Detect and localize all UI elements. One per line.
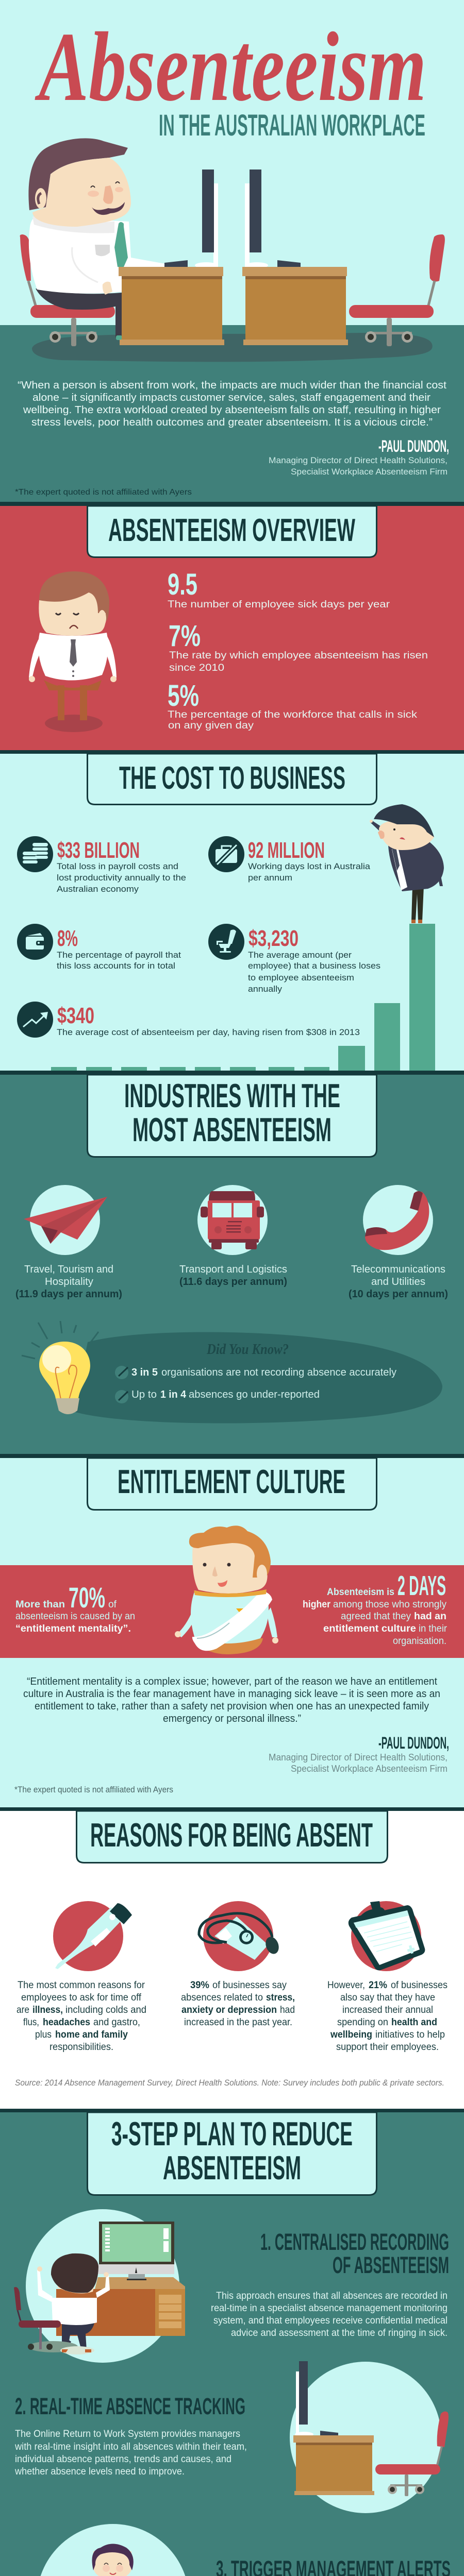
reason: illness: including colds and — [65, 2005, 146, 2015]
icon: paper plane — [24, 1197, 107, 1244]
heading — [88, 754, 376, 805]
callout: 70 percent: absenteeism is caused by an — [15, 1611, 135, 1622]
red band — [0, 1565, 464, 1658]
step 1 text: This approach ensures that all absences are recorded in — [216, 2291, 448, 2301]
callout: 70 percent: 70% — [69, 1581, 105, 1614]
fact: 3 in 5: 3 in 5 — [131, 1367, 158, 1378]
industry: transport: (11.6 days per annum) — [179, 1276, 287, 1287]
step 2 illustration: empty desk — [290, 2361, 449, 2513]
stat: 3,230: $3,230 — [248, 926, 299, 951]
icon: trend arrow — [17, 1002, 53, 1038]
callout: 70 percent: More than — [15, 1599, 65, 1610]
stat: rate risen — [169, 619, 428, 673]
stat: 3,230 — [208, 924, 380, 994]
reason: wellbeing spending: spending on — [337, 2017, 388, 2028]
callout: 2 days: among those who strongly — [333, 1599, 446, 1610]
heading: ABSENTEEISM — [163, 2149, 301, 2187]
reason: wellbeing spending: support their employees. — [336, 2042, 439, 2053]
panel: 3-step plan — [0, 2109, 464, 2576]
step 2 text: with real-time insight into all absences within their team, — [14, 2442, 247, 2452]
reason: wellbeing spending — [327, 1901, 448, 2053]
step 2 text: whether absence levels need to improve. — [14, 2466, 185, 2477]
heading — [88, 506, 376, 557]
stat: workforce: The percentage of the workforce that calls in sick — [168, 709, 418, 720]
step 1 text — [211, 2229, 449, 2338]
footnote: *The expert quoted is not affiliated with Ayers — [14, 1785, 173, 1794]
attribution: Managing Director of Direct Health Solutions, — [269, 1752, 448, 1762]
quote: emergency or personal illness.” — [163, 1713, 301, 1724]
attribution: Specialist Workplace Absenteeism Firm — [291, 1764, 448, 1774]
stat: 33 billion: Total loss in payroll costs and — [57, 862, 178, 871]
illustration: right desk — [242, 267, 348, 345]
reason: illness: headaches — [43, 2017, 90, 2028]
industry: transport — [179, 1185, 287, 1287]
quote: alone – it significantly impacts customer service, sales, staff engagement and their — [32, 392, 430, 403]
callout: 2 days: had an — [414, 1611, 446, 1622]
reason: wellbeing spending: 21% — [369, 1980, 387, 1991]
floor shadow — [32, 333, 433, 362]
quote: entitlement to take, rather than a safety net provision when one has an unexpected family — [35, 1701, 429, 1712]
icon: check 2 — [115, 1390, 128, 1403]
icon: blood pressure cuff — [199, 1913, 281, 1960]
callout: did you know: Did You Know? — [206, 1342, 289, 1358]
step 1 text: real-time in a specialist absence management monitoring — [211, 2303, 448, 2314]
reason: wellbeing spending: health and — [391, 2017, 437, 2028]
reason: stress: anxiety or depression — [181, 2005, 277, 2015]
panel: the cost to business — [0, 750, 464, 1071]
reason: illness: and gastro, — [93, 2017, 140, 2028]
panel: reasons for being absent — [0, 1807, 464, 2109]
step 1 text: advice and assessment at the time of ringing in sick. — [231, 2328, 448, 2338]
quote: stress levels, poor health outcomes and greater absenteeism. It is a vicious circle.” — [31, 417, 433, 428]
stat: sick days: 9.5 — [168, 568, 197, 601]
panel: entitlement culture — [0, 1454, 464, 1807]
industry: telecommunications: (10 days per annum) — [349, 1289, 448, 1300]
callout: 2 days: Absenteeism is — [327, 1587, 394, 1598]
stat: 340 per day: $340 — [57, 1003, 94, 1028]
panel: absenteeism overview — [0, 506, 464, 750]
callout: 2 days: in their — [419, 1623, 448, 1634]
stat: workforce — [168, 679, 418, 731]
reason: illness: The most common reasons for — [18, 1980, 145, 1991]
step 3 illustration: man with two laptops — [11, 2524, 215, 2576]
stat: rate risen: The rate by which employee absenteeism has risen — [169, 650, 428, 661]
illustration: empty red chair — [349, 234, 445, 346]
reason: wellbeing spending: also say that they have — [340, 1992, 435, 2003]
industry: travel: (11.9 days per annum) — [15, 1289, 122, 1300]
illustration: two back-to-back monitors — [164, 170, 301, 268]
stat: 8 percent: 8% — [57, 926, 78, 951]
stat: 92 million: Working days lost in Australia — [248, 862, 371, 871]
industry: travel: Travel, Tourism and — [24, 1264, 113, 1275]
stat: rate risen: 7% — [169, 619, 201, 653]
icon: wallet — [17, 924, 53, 960]
callout: 2 days: agreed that they — [341, 1611, 411, 1622]
industry: transport: Transport and Logistics — [179, 1264, 287, 1275]
step 2 text: The Online Return to Work System provides managers — [15, 2429, 240, 2439]
quote: wellbeing. The extra workload created by absenteeism falls on staff, resulting in higher — [23, 404, 441, 416]
icon: clipboard — [349, 1901, 425, 1970]
man — [56, 2544, 170, 2576]
industry: telecommunications — [349, 1185, 448, 1300]
fact: 1 in 4: Up to — [131, 1389, 157, 1400]
reason: illness: employees to ask for time off — [21, 1992, 142, 2003]
reason: illness: home and family — [55, 2029, 128, 2040]
callout: 70 percent: of — [108, 1599, 117, 1610]
stat: 8 percent: The percentage of payroll that — [57, 951, 181, 960]
stat: 3,230: employee) that a business loses — [248, 961, 380, 971]
step 1 illustration: person at computer — [14, 2209, 185, 2363]
heading — [76, 1811, 388, 1863]
icon: thermometer — [55, 1903, 132, 1969]
reason: stress: 39% — [190, 1980, 209, 1991]
reason: stress: had — [280, 2005, 295, 2015]
quote: “Entitlement mentality is a complex issue; however, part of the reason we have an entitlement — [27, 1676, 437, 1687]
icon: coins — [17, 836, 53, 872]
reason: illness: are — [16, 2005, 29, 2015]
quote — [23, 1676, 440, 1724]
reason: illness: flus, — [23, 2017, 39, 2028]
reason: stress: stress, — [266, 1992, 295, 2003]
heading — [88, 2112, 376, 2195]
stat: 33 billion: $33 BILLION — [57, 838, 140, 863]
fact: 1 in 4 — [131, 1389, 320, 1400]
icon: telephone handset — [365, 1191, 429, 1250]
bar chart — [51, 924, 435, 1071]
fact: 1 in 4: absences go under-reported — [189, 1389, 320, 1400]
footnote: *The expert quoted is not affiliated with Ayers — [15, 488, 192, 497]
fact: 1 in 4: 1 in 4 — [160, 1389, 187, 1400]
stat: 8 percent — [17, 924, 181, 971]
stat: 340 per day — [17, 1002, 360, 1038]
callout: 2 days: higher — [303, 1599, 331, 1610]
attribution: Specialist Workplace Absenteeism Firm — [291, 467, 448, 477]
stat: 3,230: The average amount (per — [248, 951, 352, 960]
panel: industries with the most absenteeism — [0, 1071, 464, 1454]
reason: illness: plus — [35, 2029, 52, 2040]
attribution — [269, 437, 449, 477]
industry: travel — [15, 1185, 122, 1300]
callout: 2 days — [303, 1570, 448, 1647]
stat: 33 billion: Australian economy — [57, 885, 139, 894]
icon: crossed-out briefcase — [208, 836, 244, 872]
stat: sick days: The number of employee sick days per year — [168, 599, 390, 610]
stat: 3,230: to employee absenteeism — [248, 973, 354, 982]
industry: telecommunications: and Utilities — [371, 1276, 425, 1287]
callout: 70 percent — [15, 1581, 135, 1634]
stat: 33 billion — [17, 836, 186, 894]
fact: 3 in 5: organisations are not recording absence accurately — [161, 1367, 396, 1378]
stat: 92 million — [208, 836, 371, 883]
reason: stress: of businesses say — [212, 1980, 287, 1991]
illustration: sad man — [29, 571, 117, 732]
reason: wellbeing spending: of businesses — [391, 1980, 448, 1991]
reason: wellbeing spending: However, — [327, 1980, 365, 1991]
reason: stress — [181, 1901, 295, 2028]
stat: 92 million: 92 MILLION — [248, 838, 325, 863]
callout: 2 days: entitlement culture — [323, 1623, 416, 1634]
reason: wellbeing spending: initiatives to help — [375, 2029, 445, 2040]
attribution: Managing Director of Direct Health Solutions, — [269, 456, 448, 465]
step 2 text: individual absence patterns, trends and causes, and — [15, 2454, 231, 2465]
callout: did you know — [22, 1321, 442, 1423]
icon: empty office chair — [208, 924, 244, 960]
heading — [88, 1458, 376, 1510]
illustration: businessman on bar — [370, 804, 444, 923]
quote: culture in Australia is the fear management have in managing sick leave – it is seen more as an — [23, 1688, 440, 1700]
stat: 33 billion: lost productivity annually to the — [57, 873, 186, 883]
attribution — [269, 1734, 449, 1774]
step 2 text: 2. REAL-TIME ABSENCE TRACKING — [15, 2393, 245, 2419]
stat: sick days — [168, 568, 390, 610]
heading — [88, 1075, 376, 1157]
step 2 text — [14, 2393, 247, 2477]
quote: “When a person is absent from work, the impacts are much wider than the financial cost — [18, 380, 446, 391]
industry: travel: Hospitality — [45, 1276, 93, 1287]
illustration: smiling man with sash — [175, 1526, 278, 1654]
stat: 92 million: per annum — [248, 873, 292, 883]
stat: workforce: 5% — [168, 679, 199, 713]
reason: wellbeing spending: increased their annual — [342, 2005, 433, 2015]
callout: 70 percent: “entitlement mentality”. — [15, 1623, 131, 1634]
reason: stress: absences related to — [181, 1992, 263, 2003]
stat: rate risen: since 2010 — [169, 663, 224, 673]
stat: workforce: on any given day — [168, 720, 254, 731]
icon: truck — [201, 1191, 264, 1249]
icon: check 1 — [115, 1366, 128, 1379]
reason: illness: responsibilities. — [49, 2042, 113, 2053]
stat: 340 per day: The average cost of absenteeism per day, having risen from $308 in 2013 — [57, 1028, 360, 1037]
industry: telecommunications: Telecommunications — [351, 1264, 445, 1275]
illustration: left desk — [119, 267, 224, 345]
reason: wellbeing spending: wellbeing — [330, 2029, 372, 2040]
reason: illness — [16, 1901, 146, 2053]
stat: 8 percent: this loss accounts for in total — [57, 961, 175, 971]
reason: stress: increased in the past year. — [184, 2017, 292, 2028]
reason: illness: illness, — [32, 2005, 63, 2015]
icon: light bulb — [22, 1321, 98, 1414]
panel: hero — [0, 0, 464, 506]
step 1 text: system, and that employees receive confidential medical — [213, 2315, 448, 2326]
quote — [18, 380, 446, 428]
illustration: man at desk on chair — [20, 138, 165, 346]
stat: 3,230: annually — [248, 985, 283, 994]
callout: 2 days: organisation. — [393, 1636, 446, 1647]
